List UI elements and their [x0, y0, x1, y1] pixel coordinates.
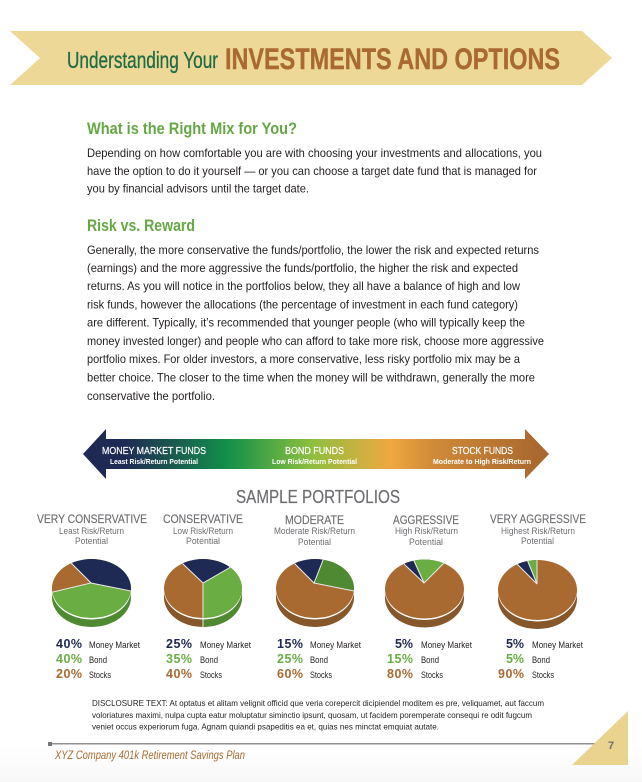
text block: right mix: Depending on how comfortable you are with choosing your investments and allocations, you	[87, 146, 542, 160]
panel: very aggressive: Potential	[521, 536, 554, 546]
legend: 40%	[166, 667, 192, 681]
heading: risk vs reward: Risk vs. Reward	[87, 216, 195, 235]
pie chart: 5 15 80	[385, 560, 464, 628]
panel: very conservative: VERY CONSERVATIVE	[37, 514, 147, 526]
panel: very aggressive: Highest Risk/Return	[501, 526, 575, 536]
panel: moderate: Moderate Risk/Return	[274, 526, 355, 536]
text block: risk vs reward: money invested longer) and people who can afford to take more risk, choose more aggressive	[87, 334, 544, 348]
legend: Money Market	[310, 640, 362, 650]
disclosure text	[92, 698, 544, 732]
panel: very conservative	[37, 514, 150, 681]
text block: risk vs reward: portfolio mixes. For older investors, a more conservative, less risky portfolio mix may be a	[87, 352, 520, 366]
legend: 35%	[166, 652, 192, 666]
panel: conservative: Potential	[186, 536, 220, 546]
legend: Money Market	[89, 640, 141, 650]
legend: 5%	[506, 637, 524, 651]
legend: 80%	[387, 667, 413, 681]
panel: very conservative: Least Risk/Return	[59, 526, 124, 536]
panel: very aggressive	[490, 514, 586, 681]
legend	[387, 637, 473, 681]
title banner: INVESTMENTS AND OPTIONS	[225, 43, 560, 76]
panel: aggressive: Potential	[409, 537, 443, 547]
pie chart: 15 25 60	[276, 559, 354, 627]
legend: 40%	[56, 652, 82, 666]
panel: conservative: Low Risk/Return	[173, 526, 233, 536]
text block: risk vs reward	[87, 243, 544, 403]
legend	[498, 637, 584, 681]
legend: 15%	[277, 637, 303, 651]
text block: right mix: you by financial advisors until the target date.	[87, 182, 309, 196]
text block: risk vs reward: returns. As you will notice in the portfolios below, they all have a balance of high and low	[87, 279, 520, 293]
legend: Money Market	[532, 640, 584, 650]
legend: 5%	[506, 652, 524, 666]
panel: conservative	[164, 514, 251, 678]
panel: moderate: MODERATE	[285, 515, 344, 527]
text block: risk vs reward: Generally, the more conservative the funds/portfolio, the lower the risk and expected returns	[87, 243, 539, 257]
risk spectrum arrow: BOND FUNDS	[285, 445, 344, 457]
panel: aggressive: High Risk/Return	[395, 526, 458, 536]
legend: Bond	[200, 655, 218, 665]
pie chart: 40 40 20	[52, 559, 131, 627]
legend: Money Market	[200, 640, 252, 650]
legend: 20%	[56, 667, 82, 681]
legend: 25%	[277, 652, 303, 666]
text block: risk vs reward: are different. Typically, it’s recommended that younger people (who will typically keep the	[87, 316, 525, 330]
disclosure text: DISCLOSURE TEXT: At optatus et alitam velignit officid que veria corepercit dicipiendel moditem es pre, veliquamet, aut faccum	[92, 698, 544, 708]
footer rule	[48, 742, 600, 746]
legend: Bond	[89, 655, 107, 665]
legend: 25%	[166, 637, 192, 651]
risk spectrum arrow	[83, 429, 549, 479]
panel: moderate	[274, 515, 361, 678]
legend	[277, 637, 362, 681]
title banner	[10, 31, 612, 85]
risk spectrum arrow: MONEY MARKET FUNDS	[102, 445, 206, 457]
panel: aggressive: AGGRESSIVE	[393, 515, 459, 527]
text block: risk vs reward: risk funds, however the allocations (the percentage of investment in each fund category)	[87, 298, 518, 312]
heading: sample portfolios: SAMPLE PORTFOLIOS	[236, 487, 400, 507]
legend: Bond	[310, 655, 328, 665]
legend: Bond	[421, 655, 439, 665]
risk spectrum arrow: Least Risk/Return Potential	[110, 457, 198, 466]
page number tab: 7	[608, 740, 614, 752]
footer text: XYZ Company 401k Retirement Savings Plan	[54, 750, 245, 762]
text block: right mix: have the option to do it yourself — or you can choose a target date fund that is managed for	[87, 164, 537, 178]
risk spectrum arrow: STOCK FUNDS	[452, 445, 513, 457]
legend	[56, 637, 141, 681]
title banner: Understanding Your	[67, 47, 218, 73]
text block: right mix	[87, 146, 542, 196]
disclosure text: veniet occus experiorum fuga. Agnam quiandi psapeditis ea et, quias nes minctat emquiat autate.	[92, 722, 439, 732]
legend: Stocks	[421, 670, 443, 680]
panel: very aggressive: VERY AGGRESSIVE	[490, 514, 586, 526]
heading: right mix: What is the Right Mix for You?	[87, 119, 297, 138]
panel: moderate: Potential	[298, 537, 331, 547]
legend: Bond	[532, 655, 550, 665]
legend: 15%	[387, 652, 413, 666]
legend: Money Market	[421, 640, 473, 650]
legend	[166, 637, 252, 681]
pie chart: 5 5 90	[498, 560, 577, 629]
text block: risk vs reward: conservative the portfolio.	[87, 389, 215, 403]
legend: Stocks	[200, 670, 222, 680]
legend: 90%	[498, 667, 524, 681]
legend: 60%	[277, 667, 303, 681]
risk spectrum arrow: Moderate to High Risk/Return	[433, 457, 531, 466]
page number tab	[572, 711, 628, 765]
legend: Stocks	[310, 670, 332, 680]
disclosure text: voloriatures maximi, nulpa cupta eatur moluptatur siminctio ipsunt, quosam, ut facidem poremperate consequi re odit fugcum	[92, 710, 532, 720]
panel: very conservative: Potential	[75, 536, 108, 546]
pie chart: 25 35 40	[164, 559, 242, 627]
legend: 5%	[395, 637, 413, 651]
legend: 40%	[56, 637, 82, 651]
legend: Stocks	[532, 670, 554, 680]
legend: Stocks	[89, 670, 111, 680]
risk spectrum arrow: Low Risk/Return Potential	[272, 457, 357, 466]
text block: risk vs reward: (earnings) and the more aggressive the funds/portfolio, the higher the risk and expected	[87, 261, 518, 275]
text block: risk vs reward: better choice. The closer to the time when the money will be withdrawn, generally the more	[87, 370, 535, 384]
panel: conservative: CONSERVATIVE	[163, 514, 243, 526]
panel: aggressive	[382, 515, 473, 681]
